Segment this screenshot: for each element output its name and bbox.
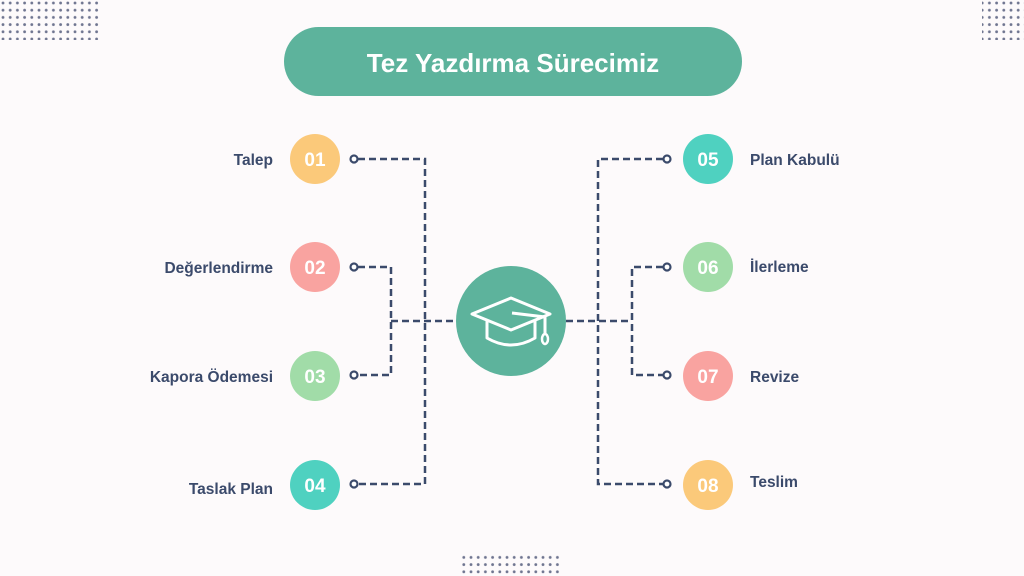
step 01: [234, 134, 340, 184]
step 06: [683, 242, 809, 292]
step 05: [683, 134, 840, 184]
step 02: Değerlendirme: [164, 260, 273, 277]
step 08: 08: [697, 476, 719, 497]
step 05: 05: [697, 150, 719, 171]
step 02: 02: [304, 258, 326, 279]
step 04: Taslak Plan: [189, 481, 273, 498]
step 07: Revize: [750, 369, 799, 386]
step 03: Kapora Ödemesi: [150, 369, 273, 386]
step 04: 04: [304, 476, 326, 497]
step 07: [683, 351, 799, 401]
step 01: 01: [304, 150, 326, 171]
step 02: [164, 242, 340, 292]
step 03: 03: [304, 367, 326, 388]
connector lines left: [350, 156, 456, 488]
title: [284, 27, 742, 96]
step 08: Teslim: [750, 474, 798, 491]
step 07: 07: [697, 367, 719, 388]
connector lines right: [566, 156, 670, 488]
icon: graduation cap center: [456, 266, 566, 376]
title: Tez Yazdırma Sürecimiz: [367, 48, 659, 78]
step 01: Talep: [234, 152, 273, 169]
step 03: [150, 351, 340, 401]
step 04: [189, 460, 340, 510]
step 08: [683, 460, 798, 510]
step 06: İlerleme: [750, 259, 809, 276]
step 06: 06: [697, 258, 719, 279]
step 05: Plan Kabulü: [750, 152, 840, 169]
